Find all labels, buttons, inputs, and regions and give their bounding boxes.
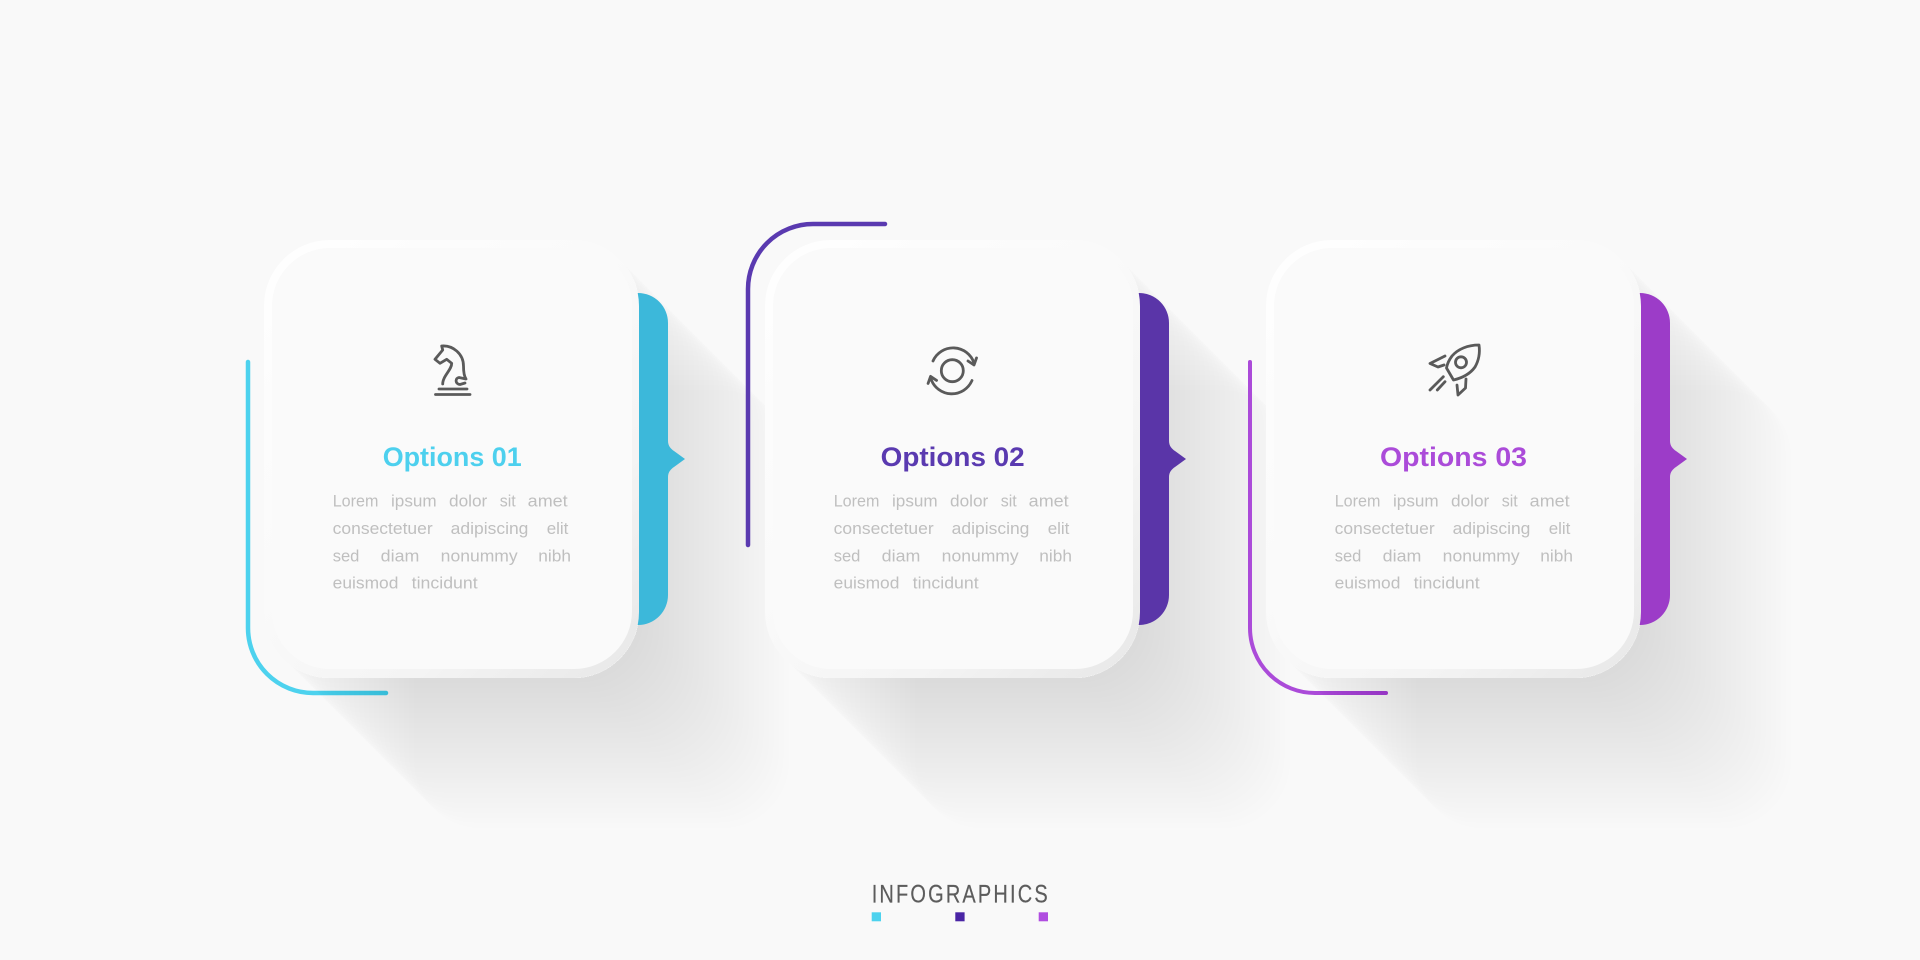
- heading: Options 01: Options 01: [383, 442, 522, 472]
- text block: option 01 description: sed: [333, 546, 359, 566]
- text block: option 03 description: Lorem: [1335, 492, 1380, 510]
- text block: option 02 description: tincidunt: [913, 574, 979, 592]
- legend square: purple: [1039, 912, 1048, 921]
- text block: option 03 description: nonummy: [1443, 546, 1520, 566]
- text block: option 02 description: nibh: [1039, 546, 1072, 566]
- heading: Options 02: Options 02: [881, 442, 1025, 472]
- icon: refresh cycle: [926, 346, 978, 396]
- text block: option 03 description: elit: [1549, 519, 1571, 538]
- accent line: option 03 bracket: [1248, 360, 1388, 695]
- text block: option 03 description: adipiscing: [1453, 519, 1530, 538]
- text block: option 02 description: adipiscing: [952, 519, 1029, 538]
- long shadow: option 02: [765, 240, 1140, 678]
- text block: option 01 description: consectetuer: [333, 519, 433, 538]
- content text: option 02: [834, 442, 1072, 592]
- card: option 02: [765, 240, 1140, 678]
- text block: option 01 description: dolor: [449, 492, 488, 510]
- icon: rocket: [1428, 344, 1481, 396]
- text block: option 03 description: tincidunt: [1414, 574, 1480, 592]
- text block: option 02 description: consectetuer: [834, 519, 934, 538]
- text block: option 03 description: sit: [1502, 492, 1518, 510]
- accent line: option 02 bracket: [746, 222, 888, 548]
- text block: option 01 description: diam: [381, 546, 419, 566]
- text block: option 01 description: nibh: [538, 546, 571, 566]
- text block: option 02 description: sed: [834, 546, 860, 566]
- text block: option 03 description: consectetuer: [1335, 519, 1435, 538]
- text block: option 03 description: sed: [1335, 546, 1361, 566]
- legend square: cyan: [872, 912, 881, 921]
- text block: option 02 description: diam: [882, 546, 920, 566]
- heading: Options 03: Options 03: [1380, 442, 1527, 472]
- text block: option 02 description: nonummy: [942, 546, 1019, 566]
- text block: option 03 description: ipsum: [1393, 492, 1439, 510]
- text block: option 02 description: euismod: [834, 574, 899, 592]
- text block: option 03 description: euismod: [1335, 574, 1400, 592]
- content text: option 03: [1335, 442, 1573, 592]
- tab: option 02 pointer: [1138, 293, 1186, 625]
- text block: option 03 description: dolor: [1451, 492, 1490, 510]
- text block: option 01 description: euismod: [333, 574, 398, 592]
- text block: option 01 description: tincidunt: [412, 574, 478, 592]
- text block: option 02 description: elit: [1048, 519, 1070, 538]
- panel: option 02: [746, 222, 1250, 788]
- card: option 01: [264, 240, 639, 678]
- text block: option 03 description: diam: [1383, 546, 1421, 566]
- panel: option 03: [1248, 288, 1751, 788]
- text block: option 02 description: sit: [1001, 492, 1017, 510]
- long shadow: option 03: [1266, 240, 1641, 678]
- text block: option 03 description: amet: [1530, 492, 1570, 510]
- legend square: indigo: [955, 912, 965, 921]
- text block: option 02 description: dolor: [950, 492, 989, 510]
- text block: option 02 description: Lorem: [834, 492, 879, 510]
- text block: option 01 description: ipsum: [391, 492, 437, 510]
- text block: option 03 description: nibh: [1540, 546, 1573, 566]
- text block: option 02 description: ipsum: [892, 492, 938, 510]
- text block: option 01 description: amet: [528, 492, 568, 510]
- tab: option 03 pointer: [1640, 293, 1687, 625]
- title: INFOGRAPHICS: INFOGRAPHICS: [872, 880, 1048, 908]
- text block: option 01 description: Lorem: [333, 492, 378, 510]
- card: option 03: [1266, 240, 1641, 678]
- text block: option 01 description: elit: [547, 519, 569, 538]
- text block: option 01 description: nonummy: [441, 546, 518, 566]
- text block: option 01 description: sit: [500, 492, 516, 510]
- text block: option 02 description: amet: [1029, 492, 1069, 510]
- text block: option 01 description: adipiscing: [451, 519, 528, 538]
- long shadow: option 01: [264, 240, 639, 678]
